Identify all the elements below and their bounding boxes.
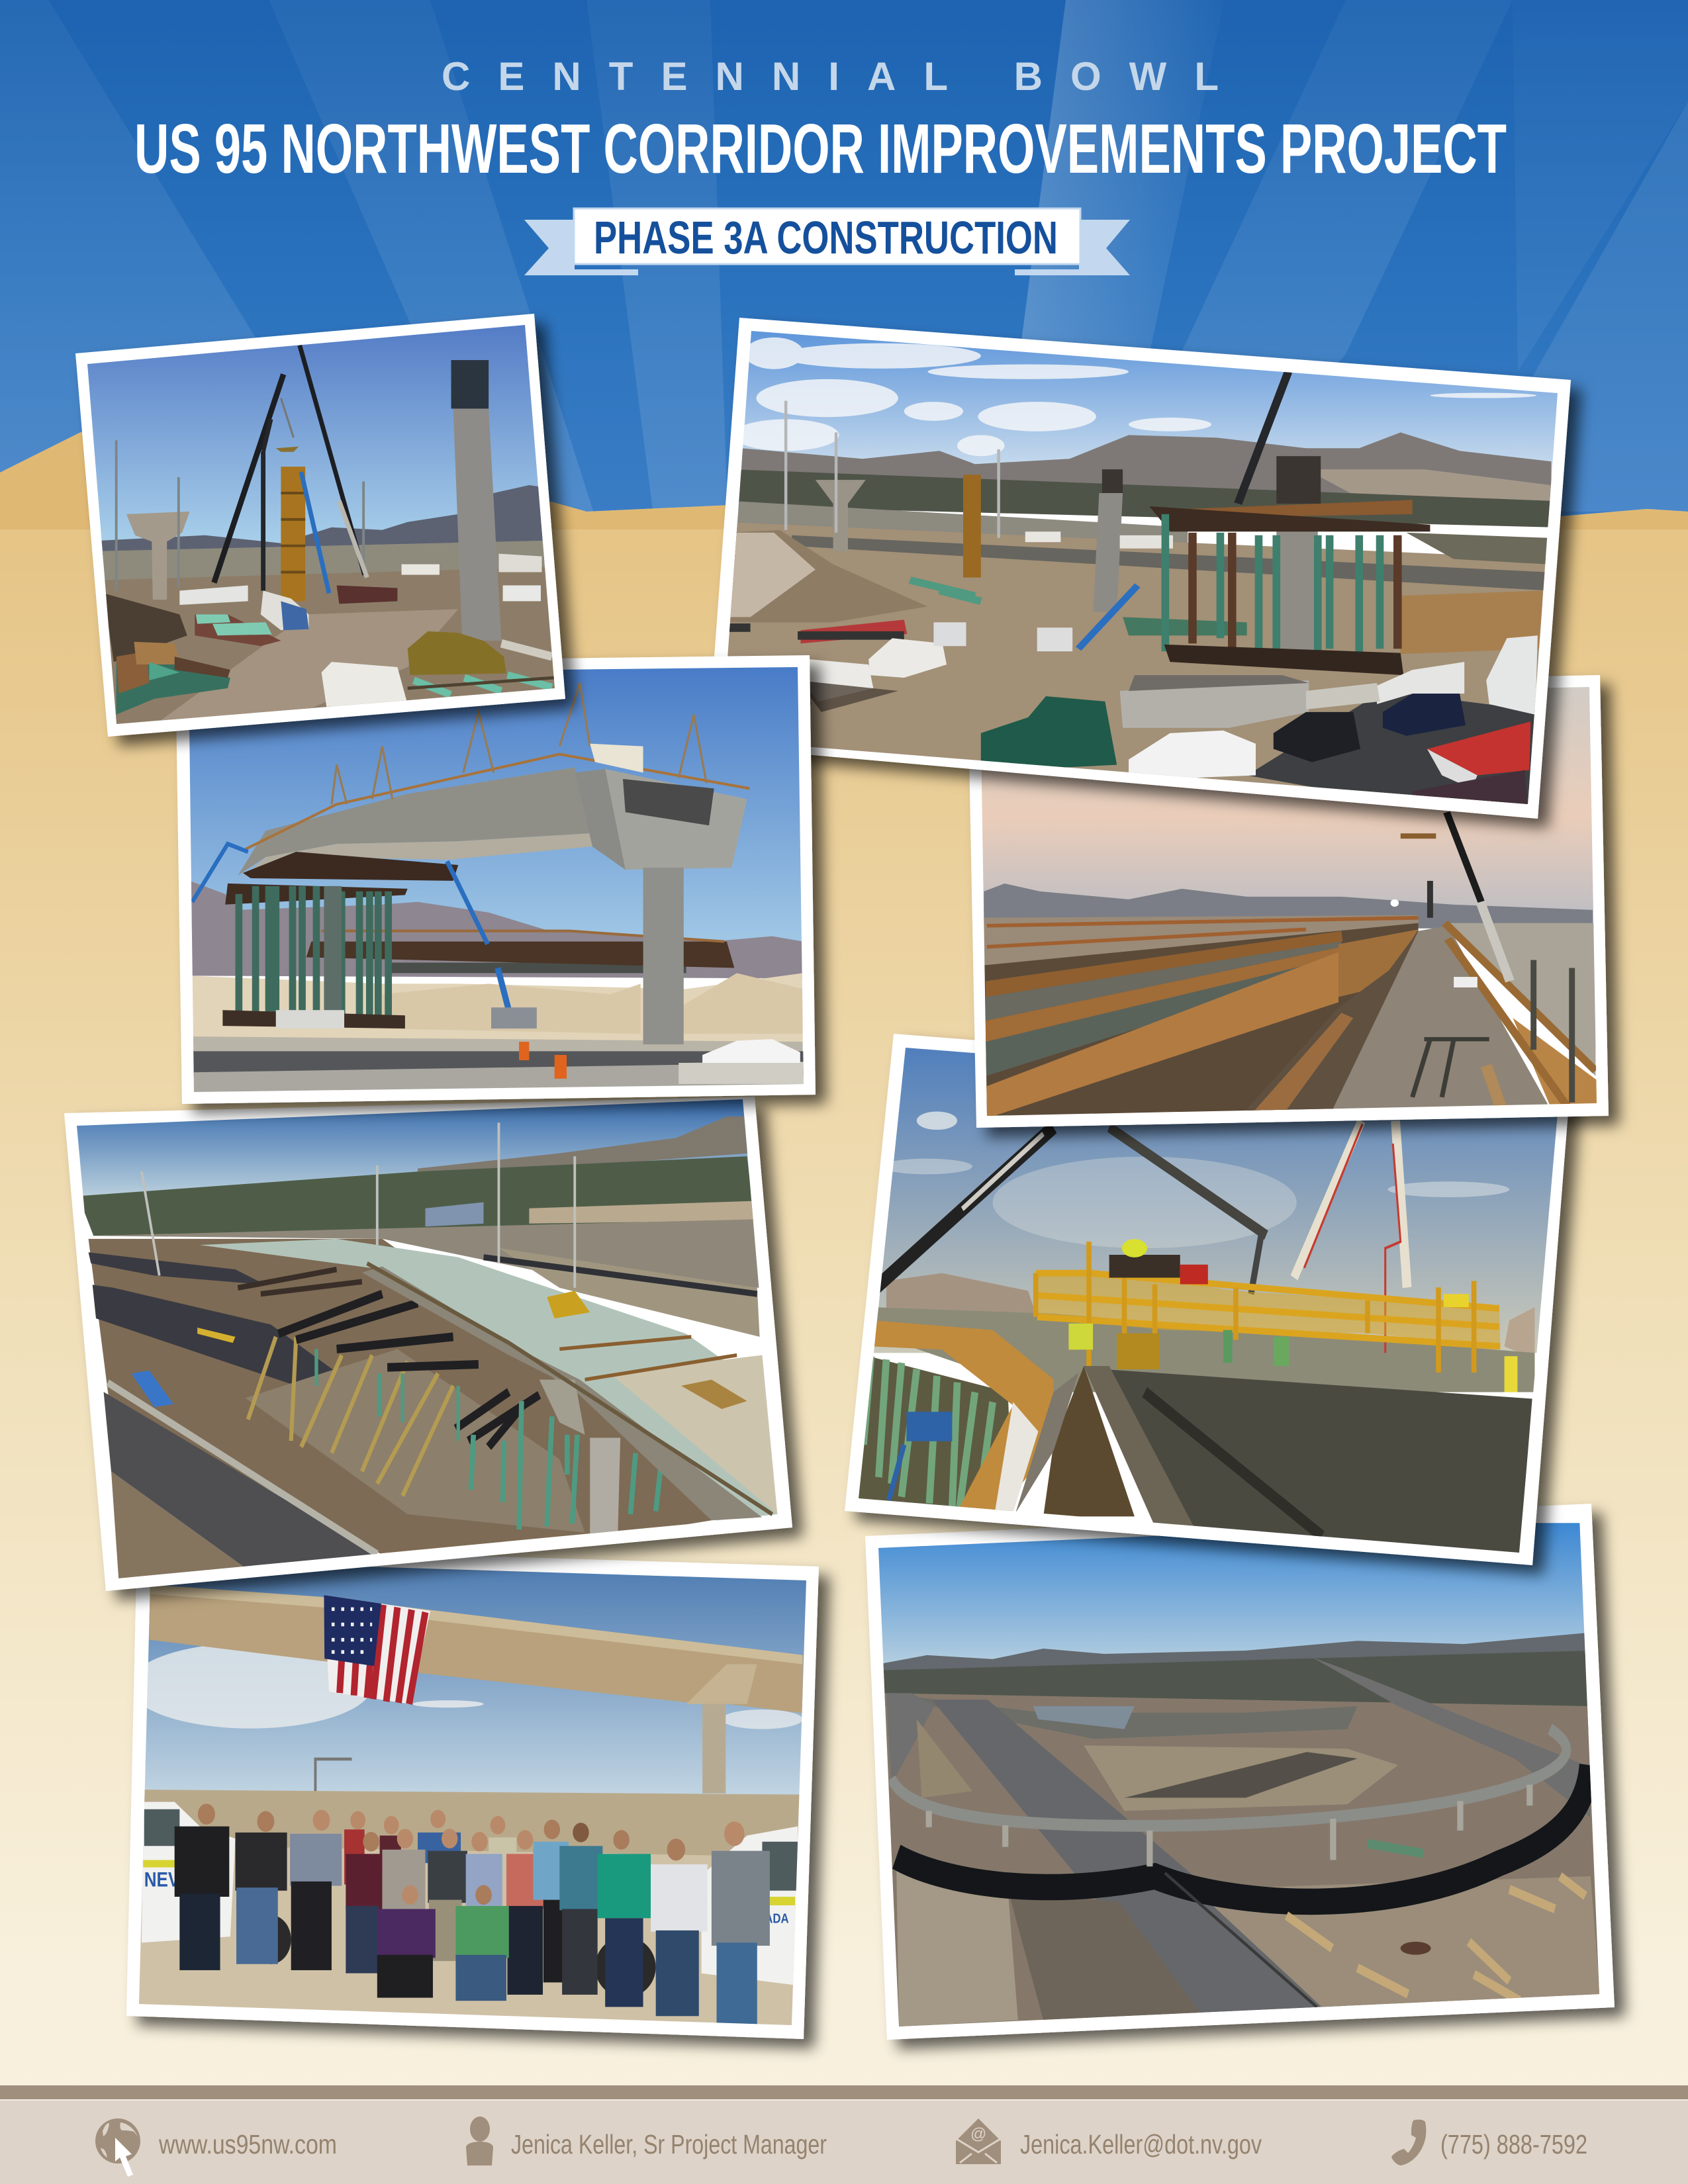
photo: project team under American flag: NEVA bbox=[144, 1868, 191, 1891]
phone number: (775) 888-7592 bbox=[1440, 2129, 1587, 2160]
photo: project team under American flag bbox=[126, 1545, 819, 2039]
blue sky background with rays bbox=[0, 0, 1688, 529]
footer bbox=[0, 2085, 1688, 2184]
website: www.us95nw.com bbox=[158, 2129, 337, 2160]
photo: bridge deck formwork at dusk bbox=[968, 675, 1609, 1128]
photo: project team under American flag: ADA bbox=[765, 1911, 789, 1926]
team of people bbox=[175, 1803, 770, 2025]
icon: envelope with at sign: @ bbox=[970, 2125, 986, 2143]
ribbon: phase banner bbox=[524, 208, 1130, 275]
photo: curved bridge on falsework with pier cap bbox=[175, 655, 816, 1104]
email: Jenica.Keller@dot.nv.gov bbox=[1020, 2129, 1262, 2160]
contact name: Jenica Keller, Sr Project Manager bbox=[511, 2129, 827, 2160]
icon: envelope with at sign bbox=[956, 2118, 1001, 2164]
photo: aerial of completed ramp ring bbox=[865, 1504, 1615, 2040]
icon: phone bbox=[1391, 2120, 1426, 2165]
icon: globe with cursor bbox=[95, 2118, 140, 2177]
photo: interchange construction site with mountains bbox=[708, 311, 1601, 819]
photo: pier construction with cranes bbox=[75, 314, 565, 737]
subtitle: CENTENNIAL BOWL bbox=[442, 54, 1219, 99]
ribbon: phase banner: PHASE 3A CONSTRUCTION bbox=[594, 212, 1058, 263]
photo: curved bridge aerial with falsework bbox=[64, 1092, 803, 1591]
icon: person bbox=[466, 2116, 493, 2165]
photo: concrete paver on bridge deck bbox=[845, 1034, 1570, 1565]
